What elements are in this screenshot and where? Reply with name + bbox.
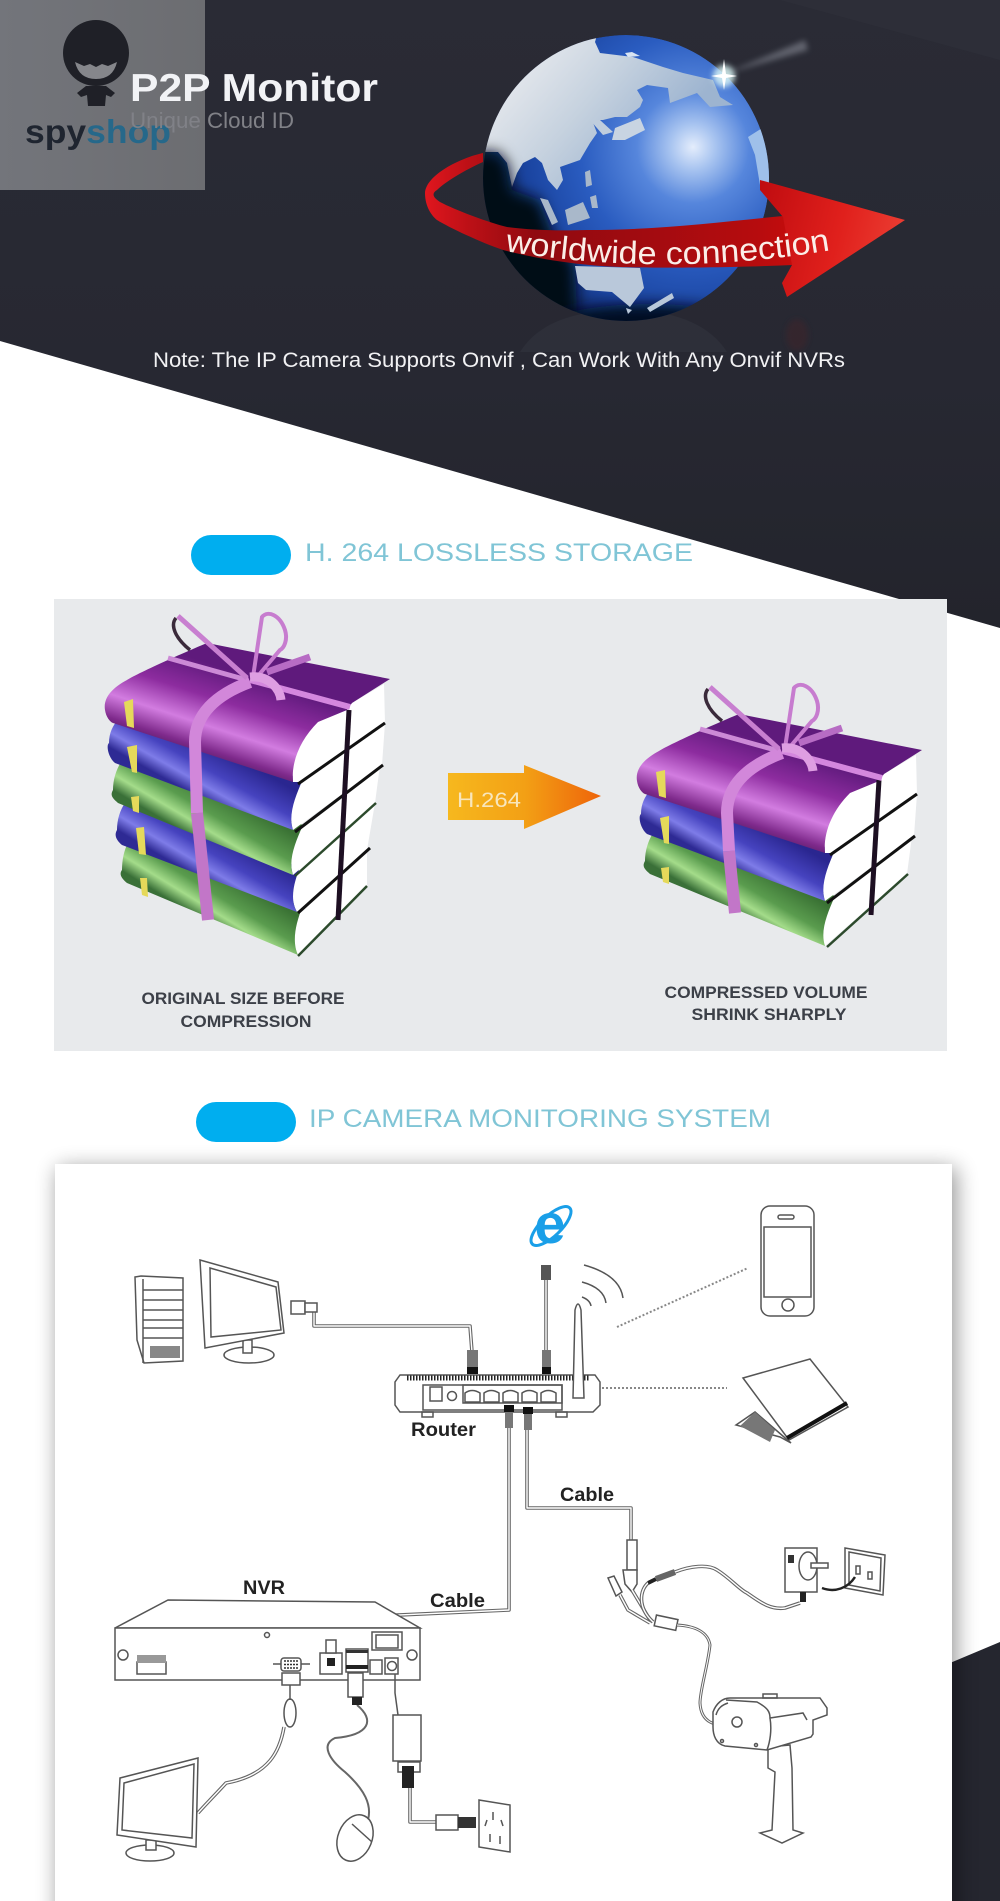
cable: router to camera — [523, 1407, 631, 1545]
logo mascot — [63, 20, 129, 106]
icon: mouse — [330, 1809, 380, 1867]
black strap — [338, 710, 349, 920]
cable: NVR to monitor — [198, 1673, 300, 1813]
heading text: IP CAMERA MONITORING SYSTEM — [309, 1105, 771, 1133]
heading text: H. 264 LOSSLESS STORAGE — [305, 539, 693, 567]
icon: bullet camera — [713, 1694, 827, 1843]
top three books — [105, 643, 390, 876]
note text: Note: The IP Camera Supports Onvif , Can Work With Any Onvif NVRs — [153, 349, 845, 372]
wifi waves — [582, 1265, 623, 1306]
cable: internet to router — [541, 1265, 551, 1374]
camera splitter and cables — [608, 1540, 800, 1725]
land: Australia — [575, 266, 644, 307]
caption: before compression: ORIGINAL SIZE BEFORE — [142, 989, 344, 1008]
cable: mouse — [328, 1673, 369, 1820]
subtitle: Unique Cloud ID — [130, 108, 294, 133]
icon: small monitor — [117, 1758, 198, 1861]
panel: storage compression — [54, 599, 947, 1051]
icon: wall socket — [479, 1800, 510, 1852]
globe dark side — [483, 140, 587, 314]
ribbon text: worldwide connection — [508, 233, 828, 264]
arrow head — [760, 180, 905, 297]
label: Cable: Cable — [430, 1591, 485, 1612]
icon: desktop monitor — [200, 1260, 284, 1363]
specular star — [711, 40, 808, 90]
books: compressed stack — [637, 685, 922, 947]
black strap — [871, 780, 879, 915]
blue book — [116, 803, 375, 913]
yellow tabs — [124, 699, 148, 897]
land: Asia — [485, 38, 733, 190]
globe reflection — [520, 310, 808, 352]
globe sphere — [483, 35, 769, 321]
books: original stack — [105, 614, 390, 956]
arrow: H.264 — [448, 765, 601, 829]
caption: before compression: COMPRESSION — [180, 1012, 312, 1031]
land: islands — [540, 170, 598, 225]
label: Router: Router — [411, 1420, 477, 1441]
panel shadow — [58, 1168, 956, 1901]
caption: compressed volume: COMPRESSED VOLUME — [664, 983, 868, 1002]
dark corner block bottom right — [900, 1642, 1000, 1901]
ribbon — [425, 153, 793, 268]
cable: monitor to router — [291, 1301, 478, 1374]
three books — [637, 714, 922, 947]
green book bottom — [121, 843, 367, 956]
caption: compressed volume — [664, 983, 868, 1024]
router — [395, 1304, 600, 1417]
dark header background — [0, 0, 1000, 628]
yellow tabs — [656, 770, 669, 884]
label: Cable: Cable — [560, 1485, 614, 1506]
logo overlay box — [0, 0, 205, 190]
title: P2P Monitor — [130, 67, 378, 110]
panel: monitoring system — [55, 1164, 952, 1901]
cable: router to NVR — [330, 1405, 514, 1640]
label: NVR: NVR — [243, 1578, 285, 1599]
icon: IE browser: e — [534, 1192, 566, 1255]
globe with red arrow — [425, 35, 905, 350]
logo wordmark: spyshop — [25, 113, 171, 150]
heading: IP camera — [196, 1102, 771, 1142]
icon: power adapter — [785, 1548, 828, 1602]
NVR unit — [115, 1600, 420, 1680]
pill — [196, 1102, 296, 1142]
icon: laptop — [736, 1359, 848, 1443]
heading: H.264 — [191, 535, 693, 575]
caption: compressed volume: SHRINK SHARPLY — [692, 1005, 847, 1024]
icon: PC tower — [135, 1276, 183, 1363]
dotted links — [602, 1268, 748, 1388]
icon: IE browser — [525, 1192, 577, 1255]
power adapter and plug — [393, 1674, 476, 1830]
arrow: H.264: H.264 — [457, 789, 521, 812]
pink straps and bow — [168, 614, 350, 920]
pink straps and bow — [700, 685, 882, 913]
caption: before compression — [142, 989, 344, 1031]
icon: smartphone — [761, 1206, 814, 1316]
icon: wall socket right — [822, 1548, 885, 1595]
pill — [191, 535, 291, 575]
